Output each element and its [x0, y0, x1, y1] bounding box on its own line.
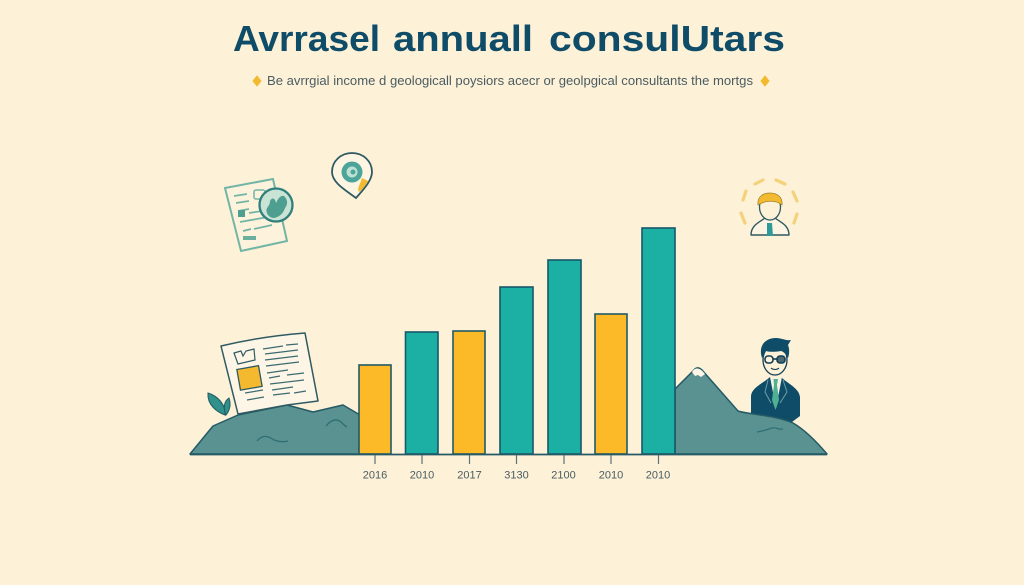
suit — [751, 377, 800, 422]
axis line — [190, 454, 827, 456]
tie — [772, 379, 779, 410]
document illustration — [221, 333, 318, 414]
subtitle — [253, 73, 769, 88]
year labels — [363, 470, 670, 482]
shirt — [770, 377, 782, 408]
snow cap — [692, 368, 705, 377]
title — [233, 18, 785, 59]
year labels: 2010 — [410, 470, 434, 482]
bar 7 — [642, 228, 675, 454]
glasses — [765, 356, 785, 363]
icon: plant — [208, 393, 230, 415]
bar chart — [190, 228, 827, 482]
left hill — [190, 405, 360, 454]
year labels: 2017 — [457, 470, 482, 482]
title: Avrrasel — [233, 18, 380, 59]
icon: left diamond — [253, 76, 261, 86]
icon: location pin — [332, 153, 372, 198]
right hill — [675, 368, 827, 454]
icon: consultant badge — [741, 180, 797, 236]
lapels — [765, 380, 787, 403]
year labels: 2010 — [646, 470, 670, 482]
year labels: 2010 — [599, 470, 623, 482]
bar 6 — [595, 314, 627, 454]
subtitle text: Be avrrgial income d geologicall poysiors acecr or geolpgical consultants the mortgs — [267, 73, 753, 88]
icon: right diamond — [761, 76, 769, 86]
ticks — [375, 455, 658, 464]
bar 1 — [359, 365, 391, 454]
year labels: 3130 — [504, 470, 529, 482]
mouth — [771, 368, 779, 370]
icon: document with globe — [225, 179, 292, 251]
bar 4 — [500, 287, 533, 454]
bar 3 — [453, 331, 485, 454]
title: annuall — [393, 18, 533, 59]
hair — [761, 338, 791, 358]
face — [763, 345, 787, 375]
title: consulUtars — [549, 18, 785, 59]
dashed ring — [741, 180, 797, 223]
bar 2 — [406, 332, 438, 454]
consultant illustration — [751, 338, 800, 422]
bar 5 — [548, 260, 581, 454]
year labels: 2016 — [363, 470, 387, 482]
year labels: 2100 — [551, 470, 576, 482]
